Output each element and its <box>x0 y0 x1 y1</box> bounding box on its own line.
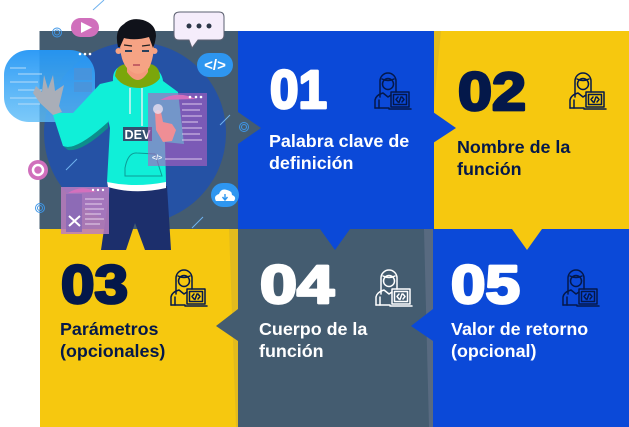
illustration: purple screen right <box>148 93 207 166</box>
text: palabra clave: Palabra clave de <box>269 131 409 151</box>
icon: developer 03 <box>171 270 207 306</box>
title: 01 number: 01 <box>270 60 327 120</box>
hood lining <box>115 64 160 88</box>
text: palabra clave: definición <box>269 153 353 173</box>
text: nombre: función <box>457 159 522 179</box>
illustration: blue circle <box>44 42 226 224</box>
illustration: purple screen right: </> <box>152 155 162 162</box>
icon: speech bubble <box>174 12 224 48</box>
title: 04 number: 04 <box>260 255 334 315</box>
illustration: diagonal accent lines <box>66 0 230 228</box>
text: cuerpo: Cuerpo de la <box>259 319 368 339</box>
title: 05 number: 05 <box>451 255 520 315</box>
arrow: slate to blue <box>238 112 261 144</box>
panel: 01 <box>238 31 434 229</box>
hoodie hem <box>107 181 166 191</box>
neck <box>127 60 148 80</box>
icon: code pill <box>197 53 233 77</box>
icon: developer 05 <box>563 270 599 306</box>
title: 03 number: 03 <box>61 255 128 315</box>
left arm <box>52 84 112 147</box>
illustration: hand left <box>33 75 64 115</box>
panel: 03 <box>40 229 238 427</box>
panel: 04 <box>216 229 433 427</box>
text: valor: (opcional) <box>451 341 537 361</box>
text: valor: Valor de retorno <box>451 319 588 339</box>
DEV label <box>123 127 152 141</box>
head <box>120 32 154 74</box>
icon: play pill <box>71 18 99 37</box>
text: parametros: (opcionales) <box>60 341 165 361</box>
eyes and mouth <box>125 50 149 52</box>
panel: illustration background <box>40 31 238 229</box>
icon: developer 01 <box>375 73 411 109</box>
title: 02 number: 02 <box>458 62 526 122</box>
icon: developer 04 <box>376 270 412 306</box>
illustration: glass screen left <box>4 50 95 122</box>
hair <box>117 19 156 48</box>
hand pointing <box>155 110 176 142</box>
drawstrings <box>130 88 142 126</box>
illustration: purple screen bottom <box>61 187 109 234</box>
text: cuerpo: función <box>259 341 324 361</box>
illustration: developer figure: DEV <box>124 127 151 142</box>
icon: target rings <box>36 28 248 212</box>
icon: cloud download <box>211 183 239 207</box>
torso <box>100 65 184 185</box>
panel: 05 <box>411 229 629 427</box>
text: nombre: Nombre de la <box>457 137 571 157</box>
trousers <box>101 186 171 250</box>
panel: 02 <box>433 31 629 229</box>
text: parametros: Parámetros <box>60 319 159 339</box>
icon: code pill: </> <box>204 57 226 74</box>
illustration: developer figure <box>52 19 184 250</box>
icon: developer 02 <box>570 73 606 109</box>
icon: gear <box>28 160 48 180</box>
